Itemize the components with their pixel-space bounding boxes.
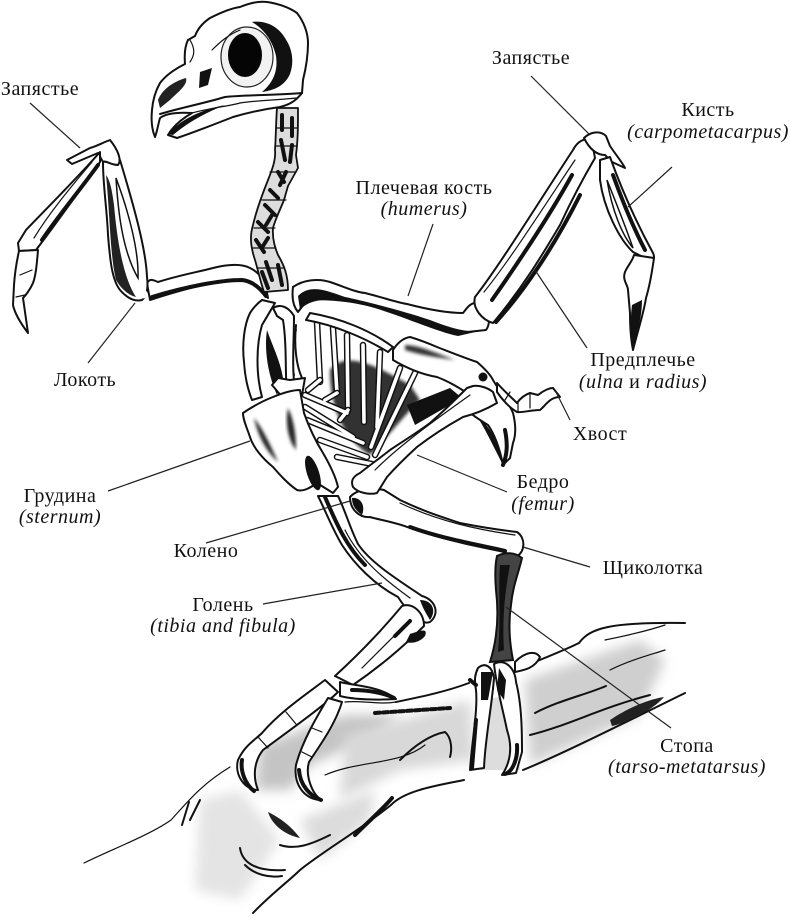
label: femur: Бедро: [517, 471, 569, 493]
label: tibia: [150, 594, 296, 637]
neck vertebrae: [251, 108, 298, 292]
right wing: wrist and hand: [584, 132, 654, 350]
tail: [497, 383, 560, 412]
leader lines: [30, 76, 672, 728]
label: forearm: (ulna и radius): [579, 371, 707, 393]
label: forearm: Предплечье: [590, 349, 696, 371]
label: femur: (femur): [511, 493, 575, 515]
label: forearm: [579, 349, 707, 393]
femur: [352, 386, 497, 494]
pelvis: [393, 337, 515, 465]
left leg: tarsus: [335, 605, 426, 685]
label: sternum: [19, 485, 101, 528]
label: femur: [511, 471, 575, 515]
label: knee: Колено: [174, 540, 238, 562]
label: tibia: Голень: [192, 594, 254, 616]
label: ankle: Щиколотка: [603, 557, 703, 579]
label: elbow: Локоть: [54, 369, 116, 391]
right leg: tarsus: [490, 553, 522, 662]
label: humerus: Плечевая кость: [356, 177, 492, 199]
label: wrist left: Запястье: [1, 78, 79, 100]
left wing: wrist and hand: [13, 140, 120, 333]
label: sternum: (sternum): [19, 506, 101, 528]
label: hand: Кисть: [681, 99, 735, 121]
label: humerus: (humerus): [381, 198, 467, 220]
right leg: tibia: [350, 489, 523, 556]
left leg: tibia: [318, 496, 436, 623]
shoulder girdle: [243, 300, 305, 400]
label: foot: [608, 735, 766, 778]
left foot: [237, 680, 396, 800]
label: hand: [627, 99, 789, 143]
skull: [152, 2, 308, 138]
right foot: [470, 653, 540, 775]
label: wrist right: Запястье: [492, 47, 570, 69]
label: sternum: Грудина: [24, 485, 96, 507]
left wing: forearm: [103, 155, 148, 301]
label: foot: Стопа: [660, 735, 714, 757]
label: tail: Хвост: [573, 423, 627, 445]
label: humerus: [356, 177, 492, 220]
ribcage: [291, 313, 462, 464]
right wing: humerus: [293, 280, 489, 336]
label: foot: (tarso-metatarsus): [608, 756, 766, 778]
right wing: forearm: [474, 140, 595, 323]
branch: [84, 623, 685, 913]
label: hand: (carpometacarpus): [627, 121, 789, 143]
left wing: humerus: [147, 265, 268, 300]
sternum: [243, 390, 338, 493]
label: tibia: (tibia and fibula): [150, 615, 296, 637]
